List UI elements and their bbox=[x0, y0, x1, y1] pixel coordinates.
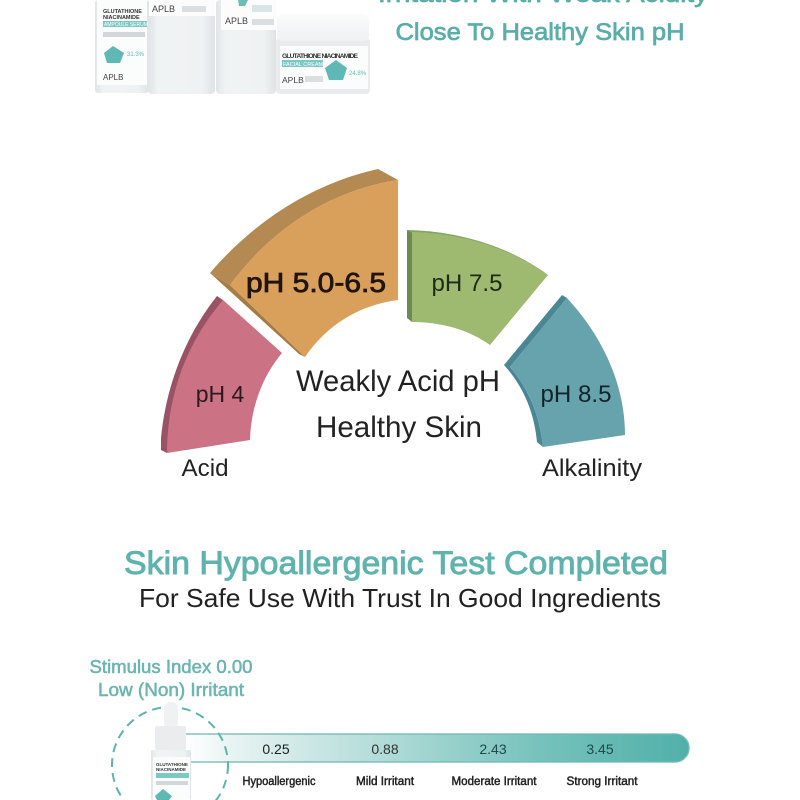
label: acid: Acid bbox=[182, 455, 228, 482]
scale label: strong irritant: Strong Irritant bbox=[566, 776, 638, 788]
product: serum dropper bottle: GLUTATHIONE bbox=[156, 762, 188, 767]
product: serum dropper bottle bbox=[151, 702, 191, 800]
callout: stimulus index bbox=[90, 657, 252, 700]
scale label: hypoallergenic: Hypoallergenic bbox=[242, 776, 316, 788]
segment: pH 8.5: pH 8.5 bbox=[540, 381, 612, 408]
product: clear bottle: APLB bbox=[152, 4, 175, 14]
segment: pH 5.0-6.5: pH 5.0-6.5 bbox=[246, 267, 386, 298]
product: facial cream jar: GLUTATHIONE NIACINAMIDE bbox=[282, 53, 359, 60]
scale label: mild irritant: Mild Irritant bbox=[356, 776, 415, 788]
product: facial cream jar: APLB bbox=[282, 75, 304, 85]
heading: skin hypoallergenic test: Skin Hypoallergenic Test Completed bbox=[124, 545, 668, 581]
product group photo bbox=[95, 0, 370, 94]
scale value: 0.25: 0.25 bbox=[262, 741, 290, 757]
product: ampoule serum bottle: GLUTATHIONE bbox=[103, 9, 142, 15]
scale value: 2.43: 2.43 bbox=[479, 741, 507, 757]
product: ampoule serum bottle bbox=[95, 0, 149, 93]
product: clear bottle two bbox=[216, 0, 276, 94]
segment: pH 8.5 bbox=[504, 295, 625, 447]
product: clear bottle two: APLB bbox=[225, 16, 248, 26]
heading: close to healthy skin pH: Close To Healthy Skin pH bbox=[396, 19, 684, 46]
label: healthy skin: Healthy Skin bbox=[316, 411, 482, 444]
product: ampoule serum bottle: NIACINAMIDE bbox=[103, 15, 140, 21]
product: serum dropper bottle: NIACINAMIDE bbox=[156, 767, 186, 772]
irritation scale bar bbox=[185, 734, 689, 788]
segment: pH 4 acid: pH 4 bbox=[196, 381, 244, 407]
product: clear bottle bbox=[148, 0, 215, 94]
heading: close to healthy skin pH bbox=[378, 0, 708, 46]
product: facial cream jar bbox=[276, 14, 370, 94]
label: alkalinity: Alkalinity bbox=[542, 455, 642, 482]
subheading: safe use: For Safe Use With Trust In Good Ingredients bbox=[139, 583, 661, 613]
callout: stimulus index: Stimulus Index 0.00 bbox=[90, 657, 252, 677]
product: facial cream jar: FACIAL CREAM bbox=[283, 62, 324, 68]
segment: pH 7.5: pH 7.5 bbox=[432, 270, 502, 297]
callout: stimulus index: Low (Non) Irritant bbox=[98, 680, 244, 700]
scale value: 0.88: 0.88 bbox=[371, 741, 399, 757]
label: weakly acid pH: Weakly Acid pH bbox=[296, 365, 500, 398]
segment: pH 7.5 bbox=[407, 230, 548, 345]
product: ampoule serum bottle: 31.3% bbox=[127, 52, 145, 58]
product: facial cream jar: 24.8% bbox=[349, 71, 367, 77]
scale value: 3.45: 3.45 bbox=[586, 741, 614, 757]
product: ampoule serum bottle: AMPOULE SERUM bbox=[104, 22, 148, 28]
segment: pH 5.0-6.5 bbox=[210, 169, 398, 357]
scale label: moderate irritant: Moderate Irritant bbox=[452, 776, 537, 788]
pH arc chart bbox=[161, 169, 642, 482]
product: ampoule serum bottle: APLB bbox=[103, 73, 123, 82]
segment: pH 4 acid bbox=[161, 296, 282, 453]
dashed circle bbox=[112, 707, 228, 800]
